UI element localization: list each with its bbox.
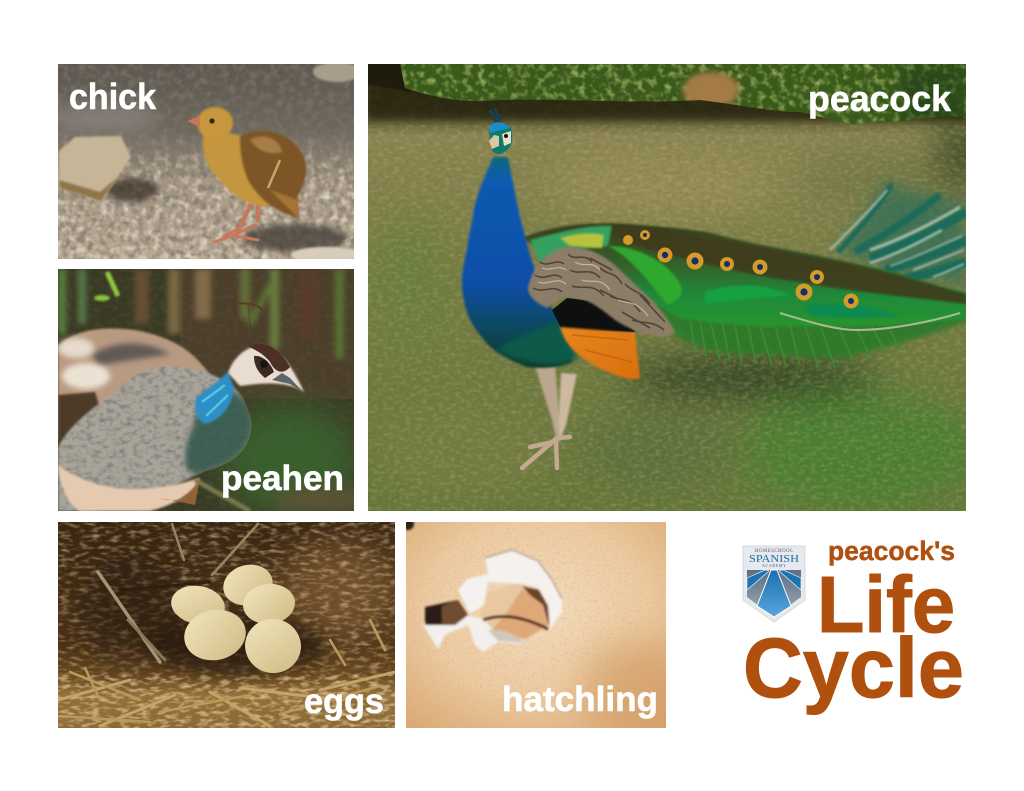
black underwing [552, 298, 636, 332]
shield name: ACADEMY [762, 563, 786, 568]
upper shell arc [458, 550, 562, 629]
barred wing [528, 247, 675, 337]
shield name: SPANISH [749, 554, 799, 565]
shield name: HOMESCHOOL [755, 549, 793, 554]
hedge [368, 64, 966, 124]
legs [535, 366, 560, 442]
label: peacock: peacock [808, 78, 952, 119]
panel: peacock photo [368, 64, 986, 511]
logo: title [743, 536, 964, 715]
head [489, 123, 512, 154]
logo: title: peacock's [828, 536, 955, 566]
panel: peahen photo [58, 269, 354, 511]
label: chick: chick [69, 76, 157, 117]
panel: hatchling photo [406, 522, 666, 728]
tail plumes [830, 180, 966, 285]
shield rays [747, 570, 801, 617]
label: eggs: eggs [304, 682, 384, 721]
chick bird [187, 107, 306, 242]
peahen bird [58, 303, 304, 515]
straw [58, 524, 395, 726]
peacock bird [462, 108, 966, 468]
panel: chick photo [50, 62, 361, 263]
logo: title: Cycle [743, 621, 964, 715]
panel: eggs photo [58, 522, 400, 728]
logo: academy shield [743, 546, 805, 622]
rock [59, 136, 131, 201]
cracked shell opening [423, 550, 562, 652]
label: hatchling: hatchling [502, 680, 658, 719]
inner cavity [480, 582, 552, 640]
reeds [58, 269, 344, 359]
logo: title: Life [817, 560, 955, 649]
orange feathers [560, 327, 640, 379]
train fringe [654, 302, 966, 361]
shield name [749, 549, 799, 568]
body and neck [462, 157, 572, 368]
label: peahen: peahen [221, 459, 344, 498]
lower shell shards [423, 612, 530, 652]
grass tones [370, 115, 986, 510]
eggs [171, 564, 301, 673]
beak line [483, 617, 548, 629]
train eyes [623, 230, 858, 308]
crest [490, 108, 500, 122]
train [522, 223, 966, 327]
left dark hole [425, 600, 468, 625]
